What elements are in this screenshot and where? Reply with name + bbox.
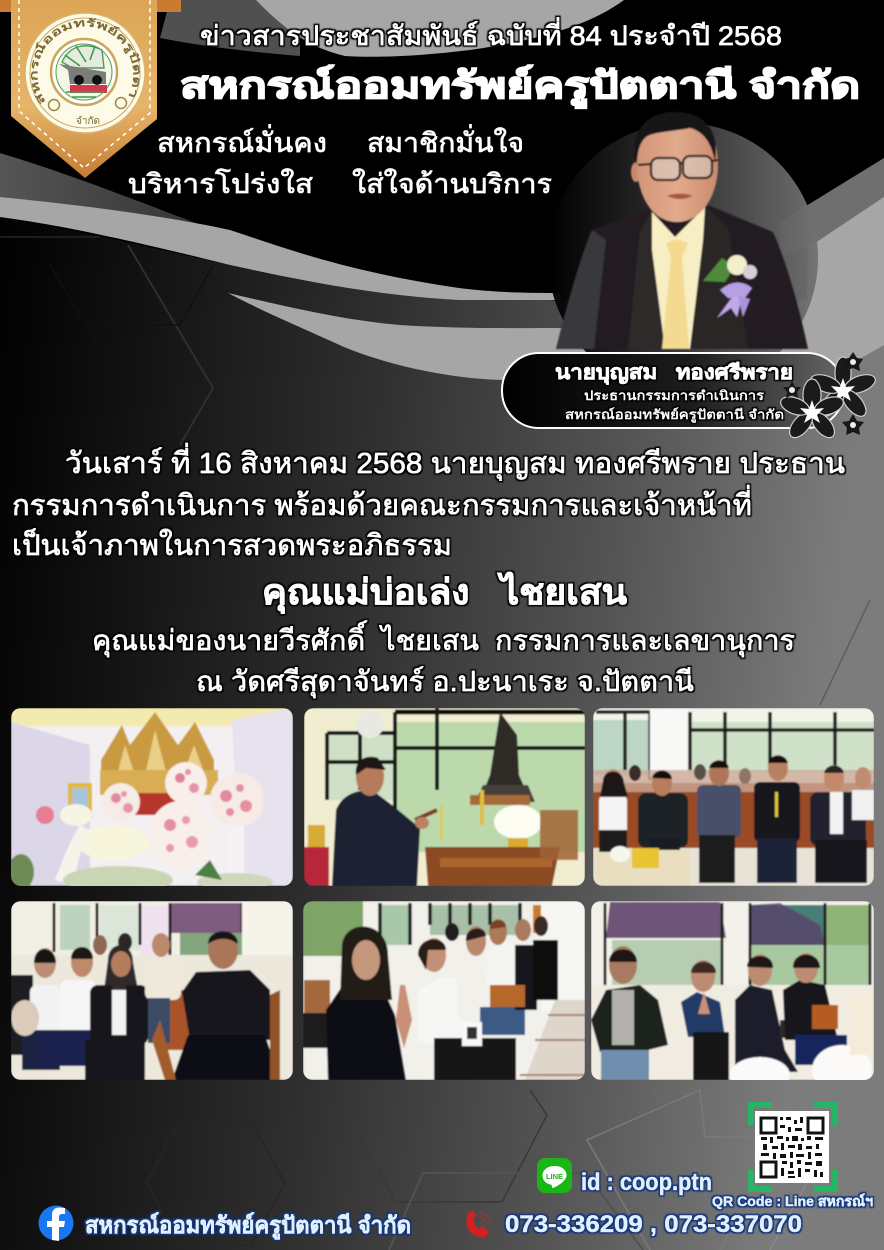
seal: จำกัด xyxy=(76,116,100,127)
ribbon top bar xyxy=(0,0,181,12)
honoree name: คุณแม่บ่อเล่ง ไชยเสน xyxy=(262,571,627,614)
icon: facebook xyxy=(38,1206,74,1241)
facebook page name: สหกรณ์ออมทรัพย์ครูปัตตานี จำกัด xyxy=(85,1212,411,1240)
honoree details xyxy=(92,620,795,699)
top light wave xyxy=(256,0,624,57)
left dark band xyxy=(0,153,230,240)
seal xyxy=(24,12,146,134)
announcement paragraph: วันเสาร์ ที่ 16 สิงหาคม 2568 นายบุญสม ทองศรีพราย ประธาน xyxy=(65,443,845,481)
icon: line xyxy=(537,1158,572,1193)
header: newsletter issue: ข่าวสารประชาสัมพันธ์ ฉบับที่ 84 ประจำปี 2568 xyxy=(200,17,782,51)
name plate xyxy=(502,352,878,442)
photo: chairman lighting candles xyxy=(304,708,585,886)
icon: flowers xyxy=(778,352,878,442)
qr pattern xyxy=(761,1117,823,1178)
second light wedge xyxy=(228,162,884,380)
dark band across xyxy=(0,236,100,238)
qr white panel xyxy=(755,1111,829,1183)
slogans xyxy=(128,124,552,199)
tie xyxy=(662,239,689,349)
photo: seated committee members xyxy=(593,708,874,886)
ribbon body xyxy=(11,0,157,178)
announcement paragraph xyxy=(12,443,845,562)
name: นายบุญสม ทองศรีพราย xyxy=(555,361,793,385)
honoree details: คุณแม่ของนายวีรศักดิ์ ไชยเสน กรรมการและเลขานุการ xyxy=(92,620,795,658)
icon: phone xyxy=(466,1211,490,1237)
slogans: บริหารโปร่งใส xyxy=(128,168,313,199)
boutonniere xyxy=(703,255,757,318)
phone contact xyxy=(466,1211,802,1238)
position: ประธานกรรมการดำเนินการ xyxy=(584,388,764,403)
guests xyxy=(11,931,280,1080)
portrait circle xyxy=(548,123,818,393)
ribbon badge with seal xyxy=(0,0,181,178)
header: organisation title: สหกรณ์ออมทรัพย์ครูปัตตานี จำกัด xyxy=(180,65,860,109)
slogans: สหกรณ์มั่นคง xyxy=(157,124,327,158)
jacket xyxy=(556,205,808,349)
hex lines xyxy=(50,245,884,1250)
slogans: สมาชิกมั่นใจ xyxy=(367,124,524,158)
photo: altar with flowers xyxy=(8,708,293,894)
photo: four guests with hands together xyxy=(591,901,874,1095)
line contact xyxy=(537,1158,712,1196)
right darker band xyxy=(780,158,884,258)
shirt xyxy=(652,207,705,349)
hair xyxy=(634,112,716,165)
phone numbers: 073-336209 , 073-337070 xyxy=(505,1211,802,1238)
announcement paragraph: เป็นเจ้าภาพในการสวดพระอภิธรรม xyxy=(12,527,452,562)
qr code block xyxy=(712,1105,873,1209)
glasses xyxy=(638,156,718,180)
main light wave xyxy=(0,197,560,300)
slogans: ใส่ใจด้านบริการ xyxy=(352,168,552,199)
icon: line: LINE xyxy=(546,1172,563,1181)
honoree details: ณ วัดศรีสุดาจันทร์ อ.ปะนาเระ จ.ปัตตานี xyxy=(196,666,694,699)
facebook contact xyxy=(38,1206,411,1241)
head xyxy=(637,118,718,222)
photo: guests praying in a row xyxy=(303,901,585,1080)
guests xyxy=(591,946,873,1080)
line id: id : coop.ptn xyxy=(581,1169,712,1196)
organisation: สหกรณ์ออมทรัพย์ครูปัตตานี จำกัด xyxy=(565,407,784,423)
ears xyxy=(631,162,641,182)
pill xyxy=(502,353,844,428)
row of guests xyxy=(326,916,558,1080)
top gray wedge xyxy=(160,0,300,56)
announcement paragraph: กรรมการดำเนินการ พร้อมด้วยคณะกรรมการและเจ้าหน้าที่ xyxy=(12,485,752,522)
people xyxy=(599,755,874,883)
stitched line xyxy=(19,0,150,168)
qr caption: QR Code : Line สหกรณ์ฯ xyxy=(712,1193,873,1209)
portrait of chairman xyxy=(556,112,808,349)
qr corner brackets xyxy=(751,1105,835,1189)
photo: seated guests with man in black shirt xyxy=(11,901,293,1080)
